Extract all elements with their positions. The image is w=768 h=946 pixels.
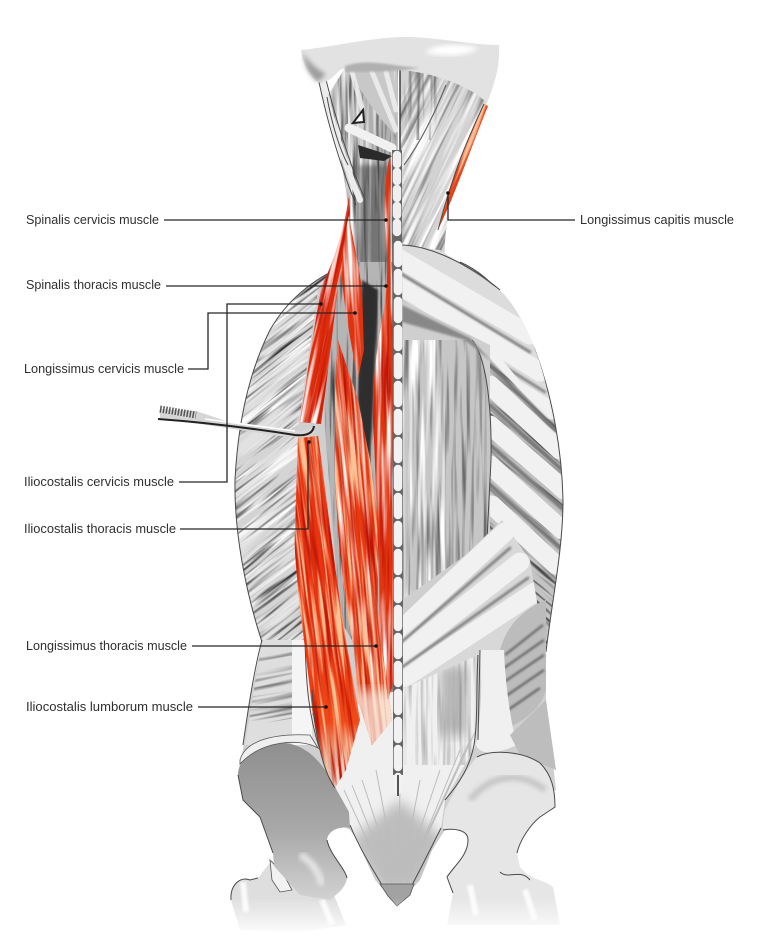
longissimus cervicis muscle [342,215,364,378]
longissimus thoracis muscle [334,340,392,745]
right rib cage [460,262,564,652]
label: Longissimus cervicis muscle [24,311,357,376]
lower left hip bones [231,860,346,932]
label: Iliocostalis cervicis muscle: Iliocostalis cervicis muscle [24,475,174,489]
label: Spinalis thoracis muscle: Spinalis thoracis muscle [26,278,161,292]
label: Longissimus cervicis muscle: Longissimus cervicis muscle [24,362,184,376]
iliocostalis thoracis and lumborum [294,436,360,788]
upper right flat muscle bands [398,245,552,420]
central gap tissue [324,262,393,692]
label: Spinalis thoracis muscle [26,278,388,292]
lower right flat muscle bands [398,520,556,770]
label: Longissimus capitis muscle [446,191,734,227]
left pelvis [238,735,350,900]
bottom fade [220,898,570,936]
neck muscles, right side [399,70,487,253]
central right vertical muscle column [402,340,492,599]
label: Spinalis cervicis muscle [26,213,388,227]
label: Longissimus thoracis muscle: Longissimus thoracis muscle [26,639,187,653]
label: Longissimus capitis muscle: Longissimus capitis muscle [580,213,734,227]
left rib cage [234,268,342,642]
skull base [301,37,499,103]
neck muscles, left side [318,68,398,262]
label: Iliocostalis lumborum muscle [26,700,328,714]
dark gap between muscles [358,280,378,470]
spine [397,150,398,796]
forceps [158,409,316,437]
longissimus capitis muscle [438,104,488,230]
anatomical figure: back muscles [158,37,564,926]
label: Iliocostalis thoracis muscle: Iliocostalis thoracis muscle [24,522,176,536]
iliocostalis cervicis and thoracis upper part [300,196,350,424]
right pelvis [443,752,560,925]
label: Iliocostalis thoracis muscle [24,440,311,536]
lateral left muscle strip [242,640,320,750]
label: Iliocostalis lumborum muscle: Iliocostalis lumborum muscle [26,700,193,714]
thoracolumbar fascia [330,655,478,906]
spinalis muscle [372,156,393,700]
label: Spinalis cervicis muscle: Spinalis cervicis muscle [26,213,159,227]
label: Iliocostalis cervicis muscle [24,302,323,489]
torso silhouette [235,262,563,900]
label: Longissimus thoracis muscle [26,639,378,653]
